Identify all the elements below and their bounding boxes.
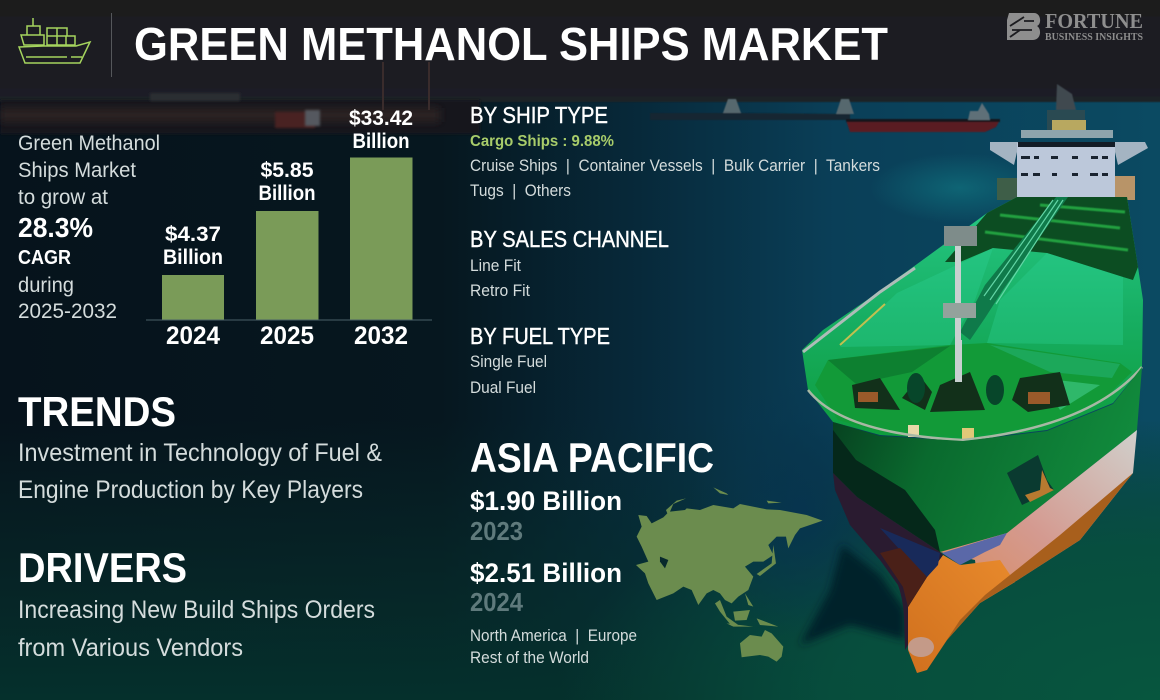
ship type list: Tugs | Others [470,181,571,200]
icon: cargo ship [19,18,90,63]
bar 2024: 2024 [166,322,220,350]
trends text: Investment in Technology of Fuel & [18,439,382,467]
CAGR intro text: Ships Market [18,159,136,182]
CAGR period: during [18,274,74,297]
trends text: Engine Production by Key Players [18,476,363,504]
ship type highlight: Cargo Ships : 9.88% [470,133,614,150]
hull shadow on water [800,545,905,645]
fuel type list [470,352,547,397]
other regions: North America | Europe [470,626,637,645]
anchor [1007,455,1054,505]
machinery stripes [985,205,1128,250]
bar 2032: Billion [352,129,410,153]
bar 2032: $33.42 [349,106,413,130]
bow blue band [880,528,940,577]
header divider [111,13,112,77]
bulbous bow orange [908,555,1015,673]
year 2023: 2023 [470,516,523,546]
panel: Asia Pacific [470,434,714,667]
bar 2025 [256,158,318,350]
logo tagline: BUSINESS INSIGHTS [1045,31,1143,43]
Caspian sea [660,557,668,568]
other regions [470,626,637,667]
bar chart: market size [146,106,432,350]
drivers heading: DRIVERS [18,544,187,591]
hull green [833,367,1142,552]
CAGR intro text: to grow at [18,186,108,209]
boot blue reflection [942,533,1007,565]
logo: Fortune Business Insights [1007,9,1143,43]
logo wordmark: FORTUNE [1045,9,1143,33]
CAGR intro text: Green Methanol [18,132,160,155]
sales channel list: Line Fit [470,256,521,275]
fuel type list: Single Fuel [470,352,547,371]
panel: by sales channel [470,226,669,300]
map: Asia Pacific [636,487,823,662]
drivers text [18,596,375,662]
CAGR value: 28.3% [18,212,93,243]
drivers text: from Various Vendors [18,634,243,662]
CAGR period: 2025-2032 [18,300,117,323]
ship walkway pipes [960,197,1068,340]
ship mast [943,226,977,355]
panel: by fuel type [470,323,610,397]
sales channel list [470,256,530,300]
value 2024: $2.51 Billion [470,558,622,588]
bar 2032: 2032 [354,322,408,350]
ship machinery band [945,197,1138,280]
sales channel heading: BY SALES CHANNEL [470,226,669,252]
fuel type heading: BY FUEL TYPE [470,323,610,349]
sales channel list: Retro Fit [470,281,530,300]
boot stripe [940,430,1137,603]
ship superstructure [990,84,1148,203]
panel: by ship type [470,102,880,200]
Asia Pacific heading: ASIA PACIFIC [470,434,714,481]
hull shadow [833,430,940,552]
distant ships [650,99,1000,132]
ship type heading: BY SHIP TYPE [470,102,608,128]
ship tank shading [840,248,1123,347]
ship [800,84,1148,673]
CAGR label: CAGR [18,247,71,269]
bar 2024: Billion [163,245,223,269]
panel: drivers [18,544,375,662]
bar 2024: $4.37 [165,222,221,246]
ship type list: Cruise Ships | Container Vessels | Bulk Carrier | Tankers [470,156,880,175]
CAGR period [18,274,117,323]
year 2024: 2024 [470,587,523,617]
forecastle equipment [808,340,1142,440]
bar 2024 [162,222,224,350]
value 2023: $1.90 Billion [470,486,622,516]
fuel type list: Dual Fuel [470,378,536,397]
panel: CAGR summary [18,132,160,323]
bar 2025: $5.85 [260,158,314,182]
other regions: Rest of the World [470,648,589,667]
bar 2025: 2025 [260,322,314,350]
ship rail [803,268,915,352]
ship deck [802,197,1143,440]
bow dark side [833,473,943,650]
trends heading: TRENDS [18,388,176,435]
bar 2025: Billion [258,181,316,205]
trends text [18,439,382,504]
logo mark [1007,13,1040,40]
panel: trends [18,388,382,504]
CAGR intro text [18,132,160,209]
bar 2032 [349,106,413,350]
ship type list [470,156,880,200]
drivers text: Increasing New Build Ships Orders [18,596,375,624]
title: GREEN METHANOL SHIPS MARKET [134,18,888,70]
